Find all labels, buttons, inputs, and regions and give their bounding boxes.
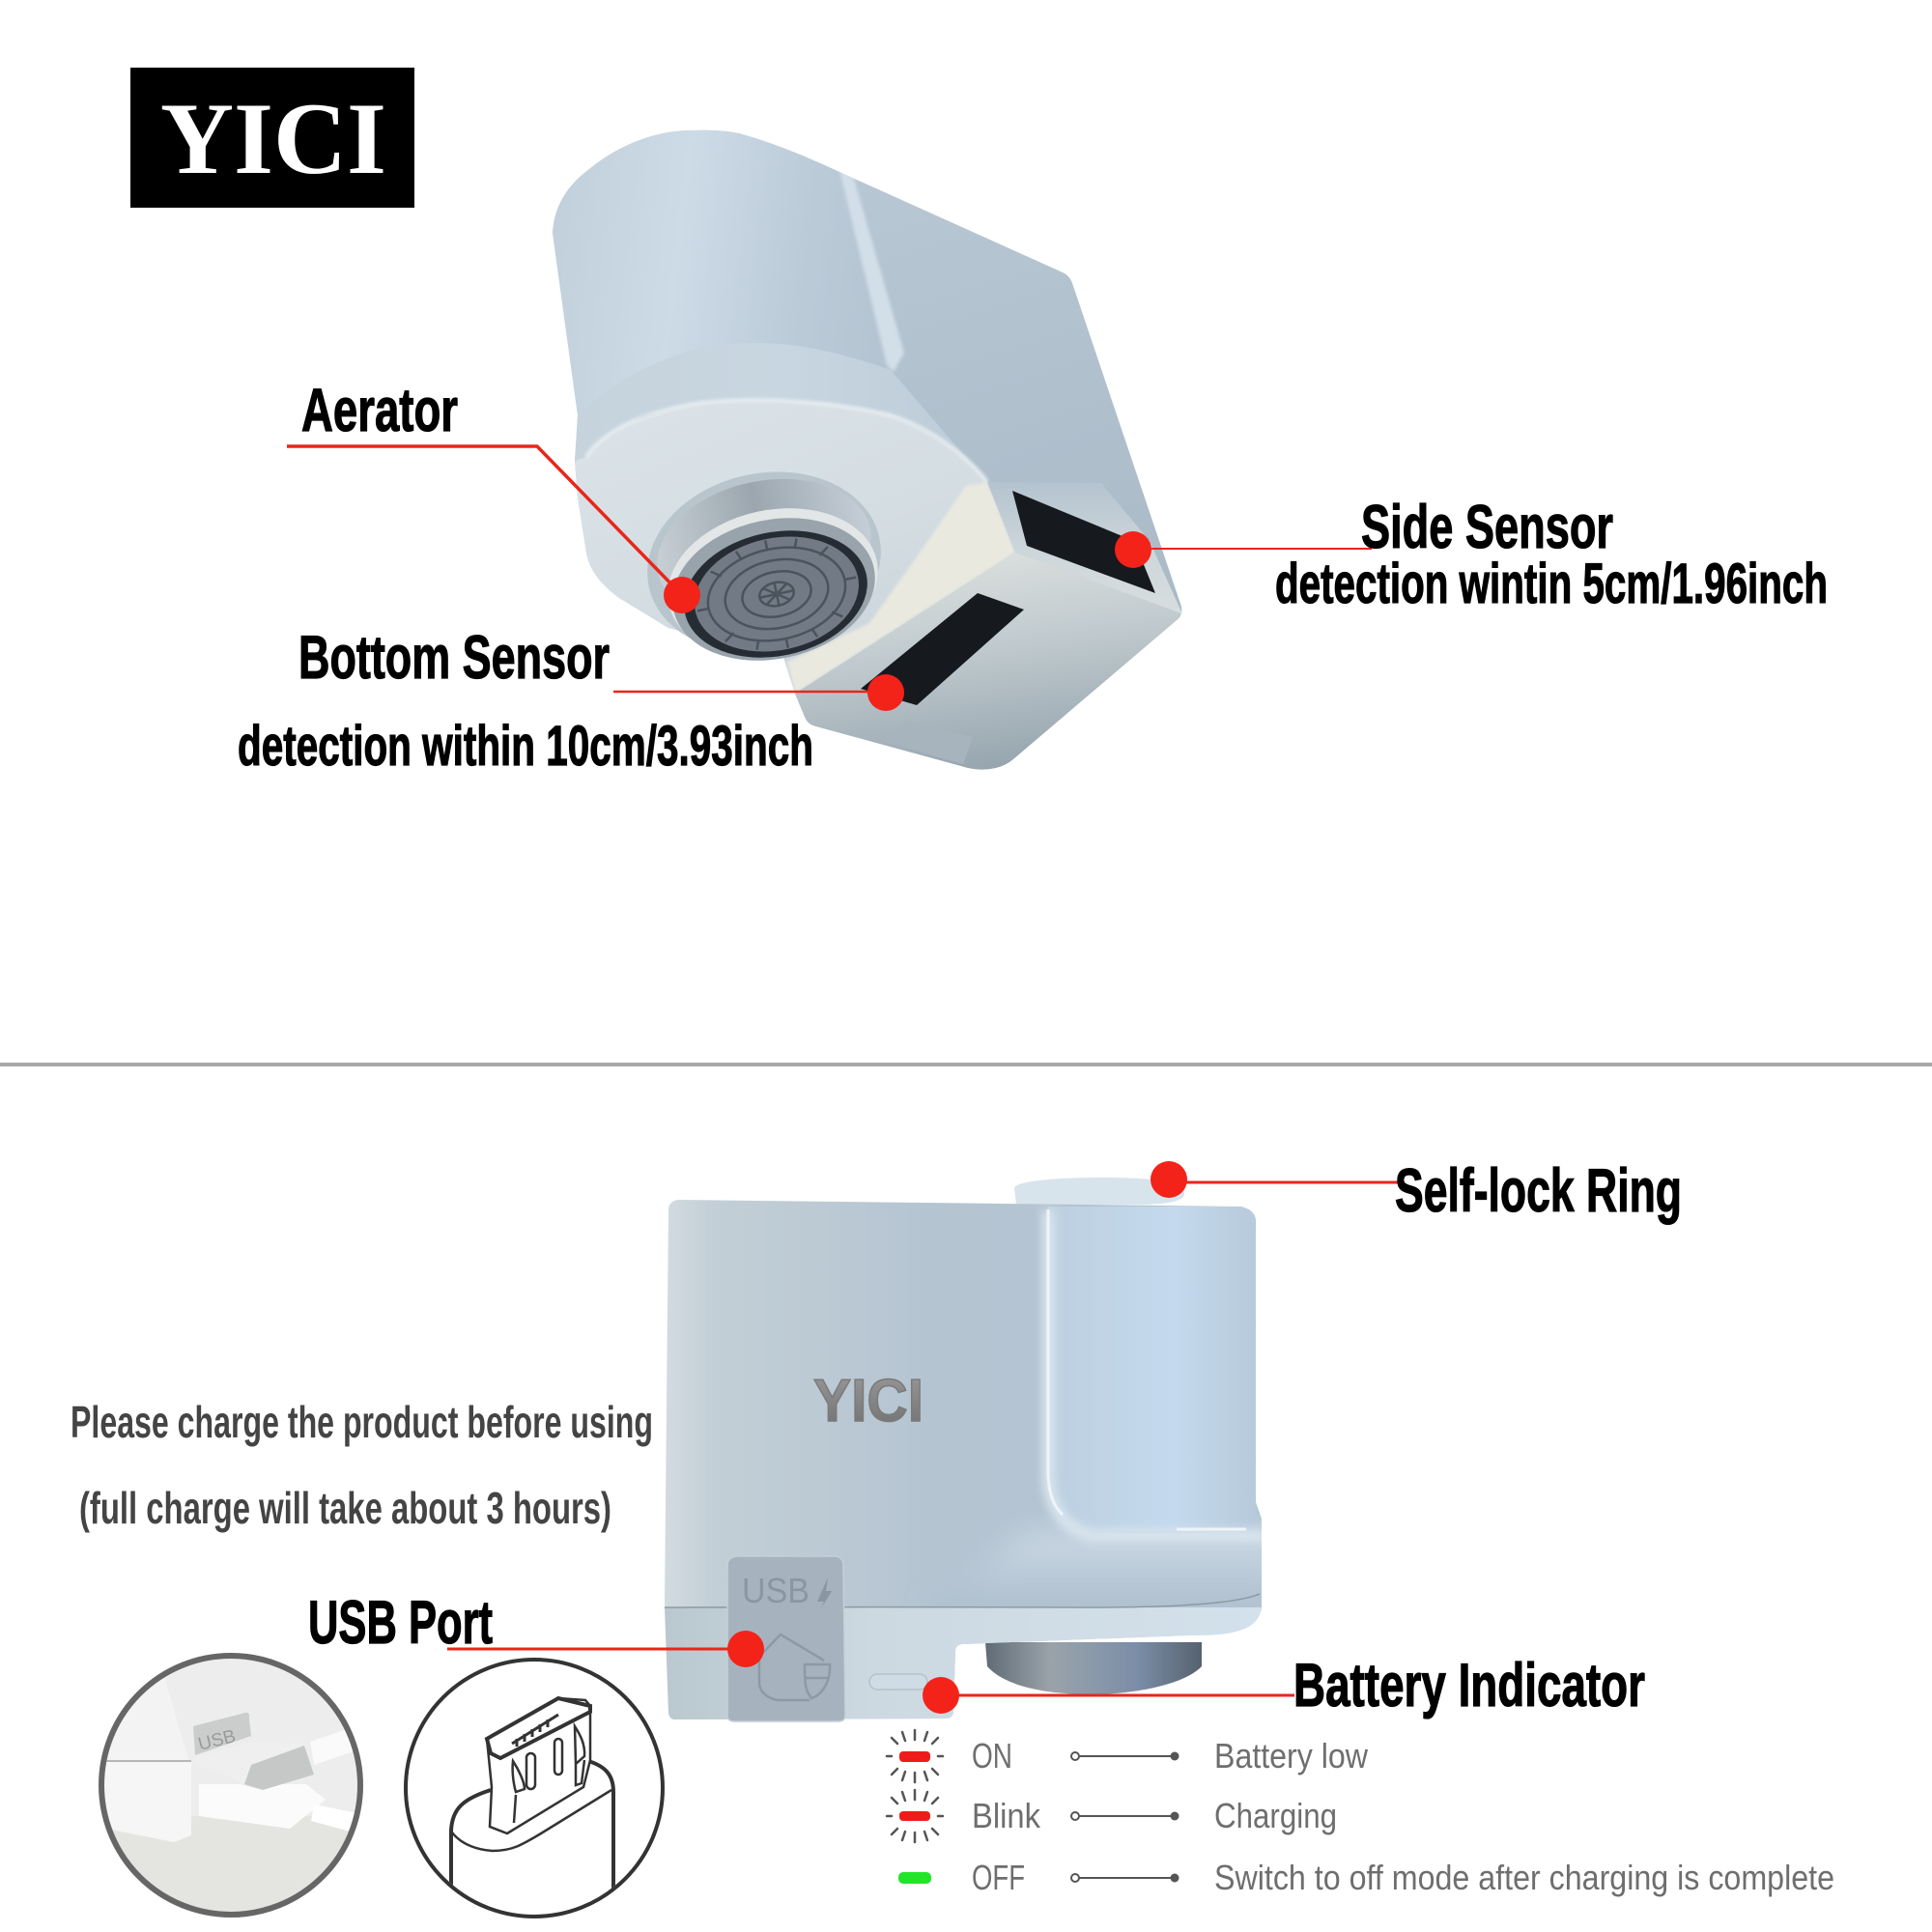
callout: Aerator: Aerator <box>301 377 458 444</box>
USB flap <box>727 1556 845 1721</box>
self-lock ring <box>1014 1178 1184 1205</box>
callout: Side Sensor: Side Sensor <box>1361 494 1613 561</box>
text: charging note: (full charge will take about 3 hours) <box>79 1483 611 1533</box>
device corner <box>97 1652 188 1760</box>
row: ON: Battery low <box>1214 1736 1369 1776</box>
aerator <box>631 451 897 678</box>
callout: Battery Indicator: Battery Indicator <box>1293 1652 1645 1719</box>
connector <box>199 1784 326 1829</box>
aerator base <box>985 1642 1202 1694</box>
callout: Side Sensor <box>1115 494 1828 615</box>
embossed YICI: YICI <box>813 1368 923 1435</box>
bottom sensor window <box>861 593 1024 705</box>
product photo: side view <box>665 1178 1285 1721</box>
callout: Battery Indicator <box>923 1652 1645 1719</box>
indicator slot <box>869 1674 927 1690</box>
callout: Self-lock Ring: Self-lock Ring <box>1395 1157 1682 1225</box>
callout: USB Port: USB Port <box>308 1589 493 1657</box>
text: charging note <box>71 1397 653 1533</box>
row: OFF: Switch to off mode after charging is complete <box>1214 1858 1834 1897</box>
side sensor window <box>1012 491 1155 593</box>
flap <box>193 1713 251 1755</box>
circle inset: USB flap photo <box>97 1652 372 1918</box>
logo: YICI: YICI <box>160 82 386 195</box>
circle inset: micro USB connector drawing <box>406 1660 663 1922</box>
row: OFF <box>898 1858 1834 1897</box>
USB flap: USB <box>742 1571 810 1610</box>
callout: Self-lock Ring <box>1151 1157 1682 1225</box>
circle inset: USB flap photo: USB <box>196 1726 238 1755</box>
legend: battery indicator states <box>887 1730 1834 1897</box>
row: OFF: OFF <box>972 1858 1025 1897</box>
row: ON <box>887 1730 1369 1782</box>
row: Blink: Charging <box>1214 1796 1337 1835</box>
text: charging note: Please charge the product before using <box>71 1397 653 1447</box>
row: Blink <box>887 1790 1337 1842</box>
rear cable <box>310 1730 353 1765</box>
callout: Bottom Sensor: detection within 10cm/3.93inch <box>238 715 813 778</box>
product photo: angled underside view <box>541 116 1198 782</box>
row: Blink: Blink <box>972 1796 1041 1835</box>
logo: YICI <box>130 68 414 208</box>
row: ON: ON <box>972 1736 1012 1776</box>
callout: Bottom Sensor: Bottom Sensor <box>298 624 610 692</box>
callout: USB Port <box>308 1589 764 1667</box>
charging slot recess <box>882 721 973 764</box>
callout: Aerator <box>287 377 700 613</box>
callout: Bottom Sensor <box>238 624 904 778</box>
